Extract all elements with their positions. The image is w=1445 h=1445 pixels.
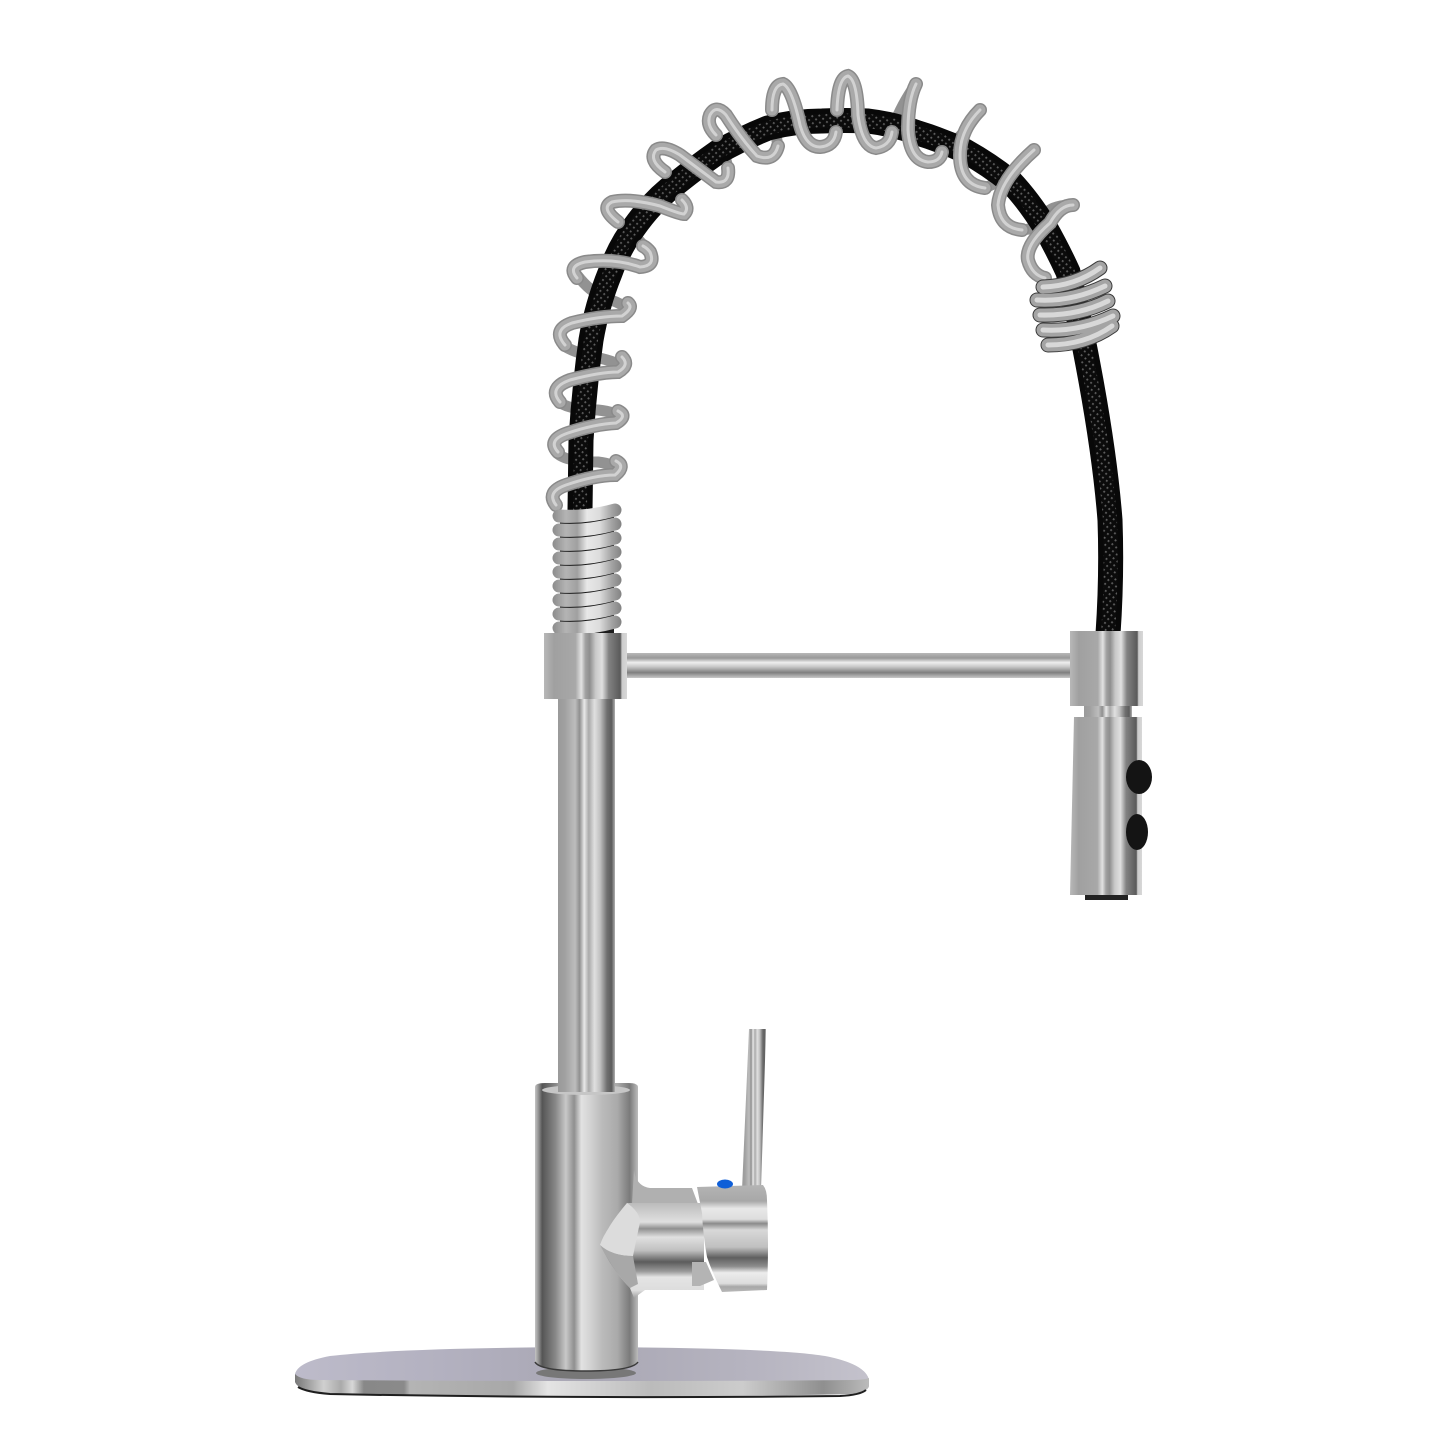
faucet base cylinder bbox=[535, 1080, 638, 1371]
left collar bbox=[544, 633, 627, 699]
braided black hose bbox=[580, 120, 1111, 634]
coil front strands over the hose bbox=[553, 76, 1073, 505]
coil back strands behind the hose bbox=[556, 84, 1073, 470]
blue indicator dot bbox=[717, 1180, 733, 1188]
upper tight coil on hose bbox=[1037, 268, 1113, 345]
spray button upper bbox=[1126, 760, 1152, 794]
right collar bbox=[1070, 631, 1143, 706]
neck between collar and spray head bbox=[1084, 706, 1132, 717]
side valve body bbox=[600, 1170, 714, 1298]
deck plate bbox=[295, 1347, 869, 1397]
lower tight spring above collar bbox=[559, 510, 615, 633]
vertical stem bbox=[558, 699, 615, 1091]
handle hub bbox=[697, 1180, 768, 1292]
spray button lower bbox=[1126, 814, 1148, 850]
handle lever bbox=[742, 1029, 766, 1190]
spray head bbox=[1070, 717, 1152, 900]
horizontal support rod bbox=[620, 653, 1072, 678]
